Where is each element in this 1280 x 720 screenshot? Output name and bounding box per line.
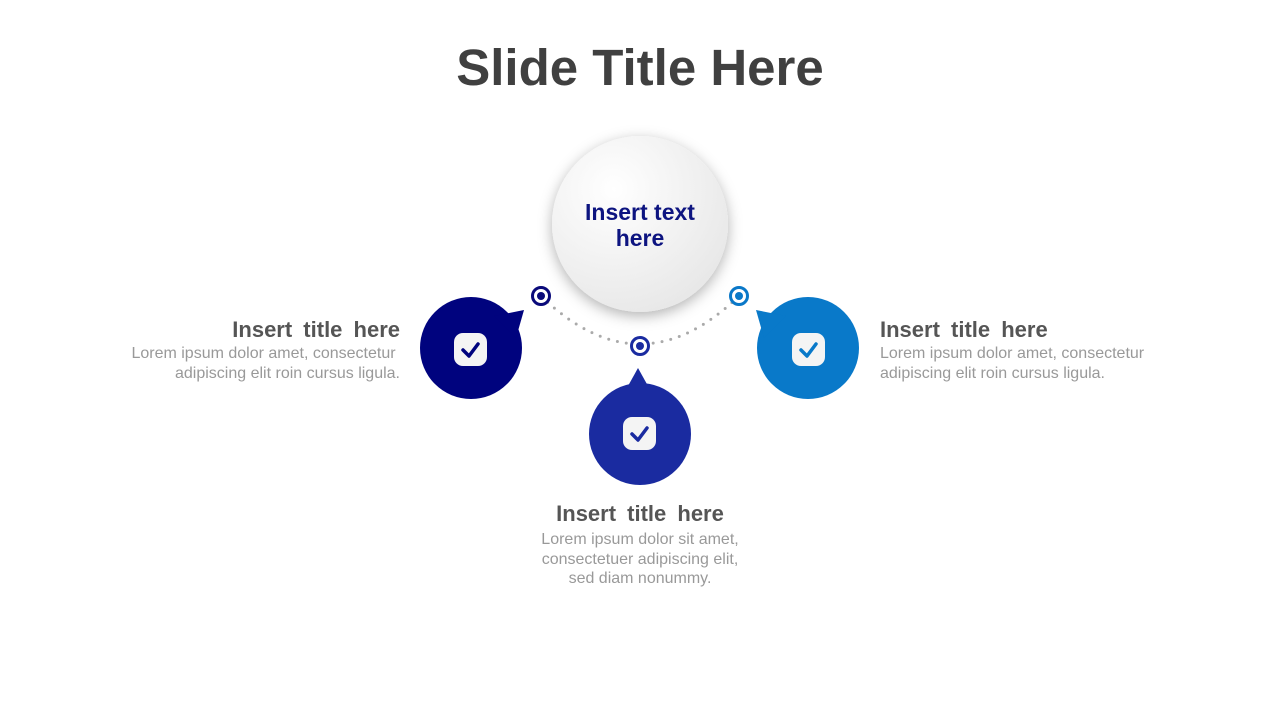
bottom circle icon	[589, 368, 691, 485]
left text block	[131, 317, 400, 382]
bottom text block: Insert title here	[556, 501, 724, 526]
bottom text block: consectetuer adipiscing elit,	[542, 550, 738, 568]
right text block: Lorem ipsum dolor amet, consectetur	[880, 345, 1144, 362]
ring markers	[532, 288, 748, 354]
right text block: Insert title here	[880, 317, 1048, 342]
left text block: Insert title here	[232, 317, 400, 342]
right text block	[880, 317, 1144, 382]
left circle icon	[420, 297, 524, 399]
bottom text block	[541, 501, 739, 587]
left text block: Lorem ipsum dolor amet, consectetur	[131, 345, 396, 362]
right text block: adipiscing elit roin cursus ligula.	[880, 364, 1105, 382]
bottom text block: sed diam nonummy.	[569, 570, 711, 587]
title: Slide Title Here	[456, 39, 824, 96]
dotted arc	[541, 296, 739, 344]
center circle: Insert text	[585, 199, 695, 225]
bottom text block: Lorem ipsum dolor sit amet,	[541, 531, 739, 548]
right circle icon	[756, 297, 859, 399]
center circle	[552, 136, 728, 312]
center circle: here	[616, 225, 664, 251]
left text block: adipiscing elit roin cursus ligula.	[175, 364, 400, 382]
